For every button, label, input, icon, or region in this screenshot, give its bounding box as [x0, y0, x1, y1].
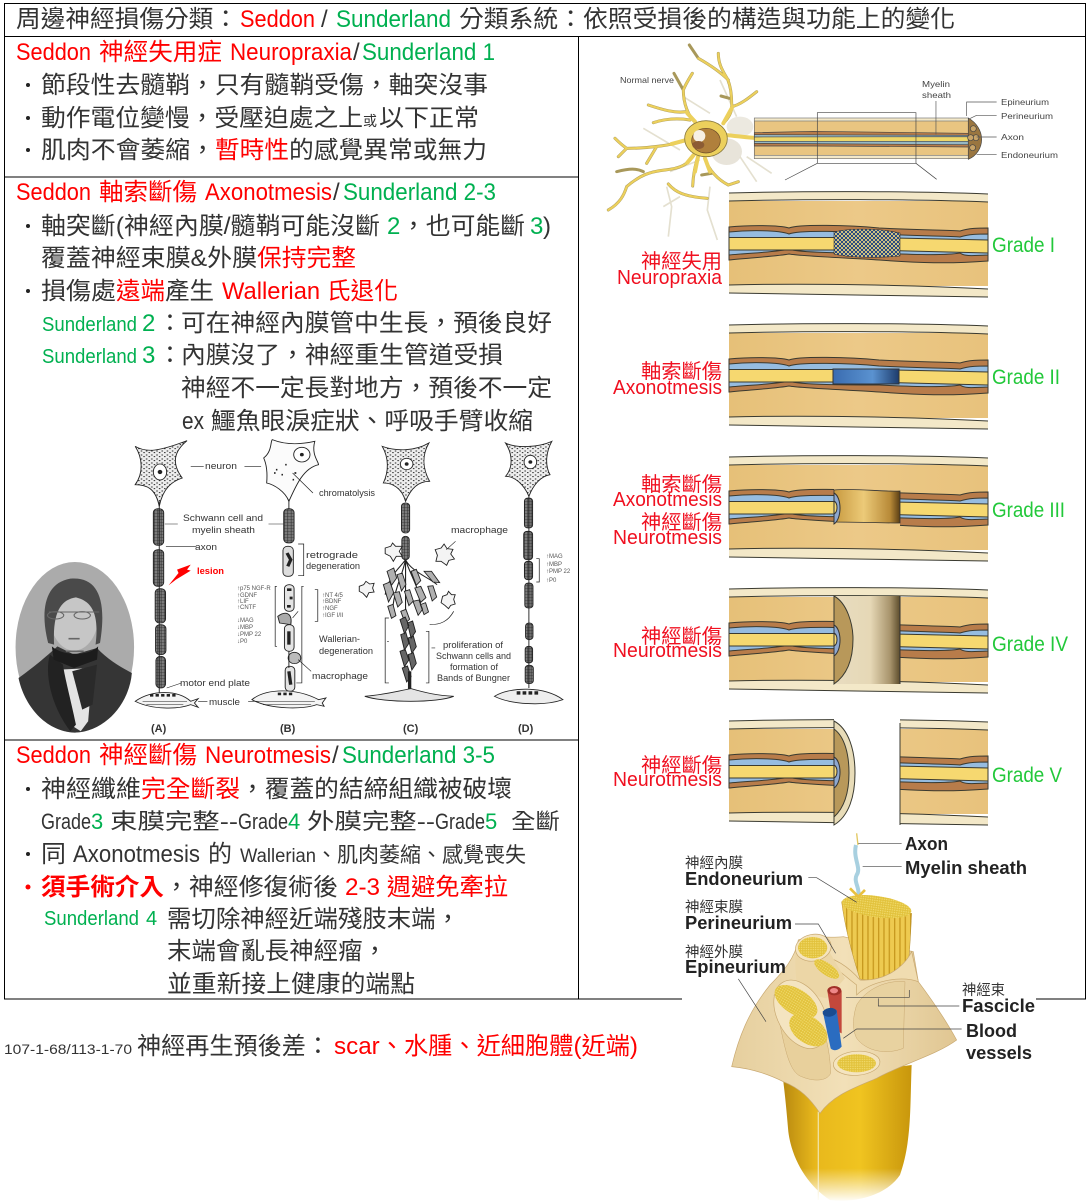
bullet list: neurotmesis: 須手術介入 [41, 874, 164, 901]
bullet list: neurotmesis: 4 [288, 809, 300, 834]
heading: neurotmesis [16, 742, 495, 769]
label: Axonotmesis and Neurotmesis: Neurotmesis [613, 527, 722, 549]
tube: Grade III [729, 456, 988, 561]
labels: Wallerian diagram: Bands of Bungner [437, 673, 510, 684]
title [16, 6, 955, 33]
injury: perineurium gap [834, 596, 900, 684]
label: Grade II: Grade II [992, 366, 1060, 389]
bullet list: neurotmesis: ，覆蓋的結締組織被破壞 [240, 776, 512, 803]
diagram: neuron cell [608, 45, 772, 240]
heading: neuropraxia: Neuropraxia [230, 39, 353, 66]
labels: Wallerian diagram: macrophage [312, 671, 368, 682]
bullet list: axonotmesis: Wallerian 氏退化 [222, 278, 398, 305]
epineurium sheath [732, 937, 957, 1113]
panel: Seddon neurotmesis [4, 740, 578, 999]
labels: Wallerian diagram [151, 461, 571, 735]
text: Sunderland 4: 4 [146, 908, 157, 930]
text: Sunderland 2 and 3: 可在神經內膜管中生長，預後良好 [181, 310, 552, 337]
bullet list: axonotmesis: 保持完整 [257, 245, 356, 272]
labels: normal nerve: sheath [922, 90, 951, 100]
footer note [4, 1033, 638, 1060]
labels: Wallerian diagram: ↑p75 NGF-R [237, 586, 271, 592]
stage C neuron [359, 443, 455, 701]
text: Sunderland 2 and 3: ex [182, 408, 204, 435]
labels: nerve anatomy: Fascicle [962, 996, 1035, 1016]
labels: Wallerian diagram: macrophage [451, 525, 508, 536]
bullet list: neurotmesis: 神經纖維 [41, 776, 141, 803]
labels: Wallerian diagram: myelin sheath [192, 525, 255, 536]
injury: complete transection [834, 721, 855, 825]
stage B neuron [237, 440, 326, 708]
lower small fascicle [833, 1050, 881, 1077]
label: Neuropraxia [617, 250, 723, 289]
labels: Wallerian diagram: ↓P0 [237, 639, 248, 645]
panel: Seddon neuropraxia [4, 36, 578, 177]
heading: neurotmesis: Seddon [16, 742, 91, 769]
labels: normal nerve: Endoneurium [1001, 150, 1058, 160]
text: Sunderland 2 and 3: 鱷魚眼淚症狀、呼吸手臂收縮 [211, 408, 533, 435]
bullet list: neuropraxia [26, 72, 488, 164]
diagram: Wallerian degeneration stages A to D [135, 440, 563, 708]
heading: neuropraxia: 神經失用症 [99, 39, 222, 66]
bullet list: axonotmesis [26, 213, 551, 305]
labels: Wallerian diagram: muscle [209, 697, 240, 708]
bullet list: neurotmesis: Grade [41, 809, 91, 834]
heading: axonotmesis [16, 179, 496, 206]
tube: Grade II [729, 324, 988, 429]
stage A neuron [135, 441, 198, 708]
title: Sunderland [336, 6, 451, 33]
labels: Wallerian diagram: degeneration [319, 646, 373, 657]
bullet list: neurotmesis: 3 [91, 809, 103, 834]
labels: nerve anatomy: 神經束 [962, 982, 1005, 999]
labels: Wallerian diagram: ↓MBP [237, 625, 253, 631]
text: Sunderland 2 and 3: 3 [142, 342, 155, 369]
front left fascicle [763, 971, 838, 1080]
text: Sunderland 2 and 3: 2 [142, 310, 155, 337]
labels: nerve anatomy: Blood [966, 1021, 1017, 1041]
title: 分類系統：依照受損後的構造與功能上的變化 [459, 6, 955, 33]
heading: neuropraxia [16, 39, 495, 66]
labels: Wallerian diagram: retrograde [306, 550, 358, 561]
label: Axonotmesis and Neurotmesis: Axonotmesis [613, 489, 722, 511]
bullet list: neuropraxia: 的感覺異常或無力 [289, 137, 487, 164]
trunk [783, 1065, 912, 1201]
label: Neuropraxia: Neuropraxia [617, 267, 723, 289]
label: Axonotmesis: Axonotmesis [613, 377, 722, 399]
labels: Wallerian diagram: ↑BDNF [322, 599, 342, 605]
label: Axonotmesis and Neurotmesis [613, 473, 722, 549]
labels: Wallerian diagram: (D) [518, 723, 534, 735]
labels: Wallerian diagram: (A) [151, 723, 167, 735]
labels: normal nerve: Axon [1001, 132, 1024, 142]
bullet list: axonotmesis: 2 [387, 213, 400, 240]
bullet list: neurotmesis: 、肌肉萎縮、感覺喪失 [316, 844, 526, 867]
heading: neuropraxia: Sunderland 1 [362, 39, 495, 66]
heading: axonotmesis: / [333, 179, 340, 206]
label: Neurotmesis IV: 神經斷傷 [641, 625, 722, 648]
heading: neuropraxia: / [353, 39, 360, 66]
title: Seddon [240, 6, 315, 33]
right pale fascicle [853, 981, 905, 1052]
bullet list: neurotmesis: 的 [208, 841, 232, 868]
labels: normal nerve [620, 75, 1058, 160]
labels: Wallerian diagram: ↑NGF [322, 606, 338, 612]
panel: right side border [578, 36, 1086, 999]
bullet list: neurotmesis: 2-3 週避免牽拉 [345, 874, 508, 901]
bullet list: neuropraxia: 肌肉不會萎縮， [41, 137, 215, 164]
text: Sunderland 2 and 3: Sunderland [42, 346, 137, 368]
bullet list: axonotmesis: 產生 [165, 278, 214, 305]
label: Grade I: Grade I [992, 234, 1055, 257]
bullet list: neurotmesis: Grade [435, 809, 485, 834]
text: Sunderland 4: 並重新接上健康的端點 [167, 971, 415, 998]
footer note: 神經再生預後差： [137, 1033, 330, 1060]
heading: axonotmesis: Sunderland 2-3 [343, 179, 496, 206]
label: Axonotmesis: 軸索斷傷 [641, 360, 722, 383]
dendrites: outline [608, 45, 760, 210]
labels: nerve anatomy [685, 834, 1035, 1063]
labels: Wallerian diagram: ↑NT 4/5 [322, 593, 344, 599]
label: Neurotmesis V: Neurotmesis [613, 769, 722, 791]
bullet list: axonotmesis: ，也可能斷 [401, 213, 525, 240]
bullet list: neurotmesis: 外膜完整-- [307, 809, 435, 834]
labels: nerve anatomy: Myelin sheath [905, 858, 1027, 878]
bullet list: neuropraxia: 暫時性 [215, 137, 289, 164]
bullet list: axonotmesis: 遠端 [116, 278, 165, 305]
upper left fascicle [793, 931, 845, 998]
tube: Grade IV [729, 588, 988, 693]
labels: Wallerian diagram: formation of [450, 662, 498, 673]
label: Neurotmesis V: 神經斷傷 [641, 754, 722, 777]
labels: Wallerian diagram: chromatolysis [319, 488, 375, 499]
labels: normal nerve: Perineurium [1001, 111, 1053, 121]
heading: neurotmesis: 神經斷傷 [99, 742, 197, 769]
heading: axonotmesis: Seddon [16, 179, 91, 206]
bullet list: neurotmesis: 同 [41, 841, 66, 868]
text: Sunderland 4: 需切除神經近端殘肢末端， [167, 906, 460, 933]
panel: Seddon axonotmesis [4, 177, 578, 740]
diagram: nerve bundle [754, 101, 997, 180]
footer note: 107-1-68/113-1-70 [4, 1041, 132, 1057]
heading: neuropraxia: Seddon [16, 39, 91, 66]
text: Sunderland 2 and 3: 內膜沒了，神經重生管道受損 [181, 342, 503, 369]
tube: Grade V [729, 720, 988, 825]
bullet list: neurotmesis: Wallerian [240, 846, 316, 867]
bullet list: neurotmesis: Grade [238, 809, 288, 834]
label: Axonotmesis and Neurotmesis: 軸索斷傷 [641, 473, 722, 496]
labels: Wallerian diagram: ↓PMP 22 [237, 632, 262, 638]
axon and myelin [850, 833, 865, 897]
magnifier frame [785, 113, 937, 180]
injury: demyelination [834, 229, 900, 257]
labels: normal nerve: Myelin [922, 79, 950, 89]
leader lines [738, 843, 962, 1038]
tube: Grade I [729, 192, 988, 297]
bullet list: axonotmesis: 3 [530, 213, 543, 240]
line: right border segment beside Fascicle [1036, 998, 1086, 1000]
labels: Wallerian diagram: ↓MAG [237, 618, 254, 624]
labels: Wallerian diagram: motor end plate [180, 678, 250, 689]
central fascicle [817, 891, 918, 995]
labels: nerve anatomy: vessels [966, 1043, 1032, 1063]
label: Neurotmesis IV: Neurotmesis [613, 640, 722, 662]
arrows and lesion [165, 466, 456, 701]
bullet list: axonotmesis: 損傷處 [41, 278, 116, 305]
text: Sunderland 2 and 3 [42, 310, 552, 435]
labels: Wallerian diagram: Schwann cell and [183, 513, 263, 524]
injury: axon gap [833, 369, 899, 384]
label: Grade III: Grade III [992, 499, 1065, 522]
labels: Wallerian diagram: lesion [197, 566, 224, 577]
labels: Wallerian diagram: (C) [403, 723, 419, 735]
labels: Wallerian diagram: proliferation of [443, 640, 503, 651]
stage D neuron [494, 441, 563, 704]
bullet list: axonotmesis: 軸突斷(神經內膜/髓鞘可能沒斷 [41, 213, 380, 240]
labels: nerve anatomy: Epineurium [685, 957, 786, 977]
label: Grade IV: Grade IV [992, 633, 1068, 656]
heading: axonotmesis: Axonotmesis [205, 179, 332, 206]
panel: title bar [4, 4, 1086, 36]
leader lines [936, 101, 997, 154]
title: 周邊神經損傷分類： [16, 6, 238, 33]
bullet list: neuropraxia: 節段性去髓鞘，只有髓鞘受傷，軸突沒事 [41, 72, 488, 99]
labels: Wallerian diagram: axon [195, 542, 217, 553]
heading: axonotmesis: 軸索斷傷 [99, 179, 197, 206]
bullet list: axonotmesis: 覆蓋神經束膜&外膜 [41, 245, 257, 272]
title: / [321, 6, 328, 33]
labels: Wallerian diagram: Wallerian- [319, 634, 360, 645]
labels: Wallerian diagram: Schwann cells and [436, 651, 511, 662]
labels: normal nerve: Normal nerve [620, 75, 674, 85]
heading: neurotmesis: Sunderland 3-5 [342, 742, 495, 769]
labels: normal nerve: Epineurium [1001, 97, 1049, 107]
label: Axonotmesis and Neurotmesis: 神經斷傷 [641, 511, 722, 534]
labels: nerve anatomy: 神經外膜 [685, 944, 743, 961]
bullet list: neurotmesis: 全斷 [511, 809, 560, 834]
heading: neurotmesis: / [332, 742, 339, 769]
labels: nerve anatomy: Axon [905, 834, 948, 854]
label: Axonotmesis [613, 360, 722, 399]
bullet list: neurotmesis [26, 776, 560, 901]
text: Sunderland 2 and 3: 神經不一定長對地方，預後不一定 [181, 375, 552, 402]
macrophages C [359, 543, 455, 609]
labels: Wallerian diagram: ↑P0 [546, 578, 557, 584]
label: Grade V: Grade V [992, 764, 1062, 787]
labels: Wallerian diagram: ↑CNTF [237, 605, 256, 611]
bullet list: neurotmesis: Axonotmesis [73, 841, 200, 868]
vein [822, 1007, 842, 1050]
bullet list: neuropraxia: 動作電位變慢，受壓迫處之上 [41, 105, 363, 132]
bullet list: neuropraxia: 或 [363, 113, 377, 129]
labels: Wallerian diagram: ↑LIF [237, 599, 249, 605]
diagram: nerve anatomy cross-section [682, 833, 1037, 1202]
soma [685, 121, 727, 157]
labels: Wallerian diagram: ↑GDNF [237, 593, 257, 599]
bullet list: neurotmesis: 束膜完整-- [110, 809, 238, 834]
labels: Wallerian diagram: neuron [205, 461, 237, 472]
label: Neurotmesis V [613, 754, 722, 791]
heading: neurotmesis: Neurotmesis [205, 742, 331, 769]
labels: Wallerian diagram: ↑PMP 22 [546, 569, 571, 575]
labels: nerve anatomy: Endoneurium [685, 869, 803, 889]
labels: nerve anatomy: 神經內膜 [685, 855, 743, 872]
label: Neuropraxia: 神經失用 [641, 250, 722, 273]
bullet list: neurotmesis: 5 [485, 809, 497, 834]
text: Sunderland 2 and 3: Sunderland [42, 314, 137, 336]
footer note: scar、水腫、近細胞體(近端) [334, 1033, 638, 1060]
bullet list: neurotmesis: 完全斷裂 [141, 776, 240, 803]
bullet list: axonotmesis: ) [543, 213, 551, 240]
text: Sunderland 2 and 3: ： [158, 342, 182, 369]
text: Sunderland 4: Sunderland [44, 908, 139, 930]
faint background neuron [643, 80, 772, 240]
labels: Wallerian diagram: (B) [280, 723, 296, 735]
labels: Wallerian diagram: ↑IGF I/II [322, 613, 344, 619]
labels: nerve anatomy: Perineurium [685, 913, 792, 933]
bullet list: neurotmesis: ，神經修復術後 [164, 874, 338, 901]
text: Sunderland 4: 末端會亂長神經瘤， [167, 938, 387, 965]
labels: Wallerian diagram: ↑MAG [546, 554, 563, 560]
artery [827, 986, 842, 1033]
labels: Wallerian diagram: ↑MBP [546, 562, 562, 568]
label: Neurotmesis IV [613, 625, 722, 662]
labels: nerve anatomy: 神經束膜 [685, 899, 743, 916]
bullet list: neuropraxia: 以下正常 [379, 105, 479, 132]
text: Sunderland 4 [44, 906, 460, 998]
injury: endoneurium gap [834, 489, 900, 523]
image: Seddon portrait [16, 562, 134, 733]
dendrites: yellow [608, 53, 760, 210]
labels: Wallerian diagram: degeneration [306, 561, 360, 572]
text: Sunderland 2 and 3: ： [158, 310, 182, 337]
